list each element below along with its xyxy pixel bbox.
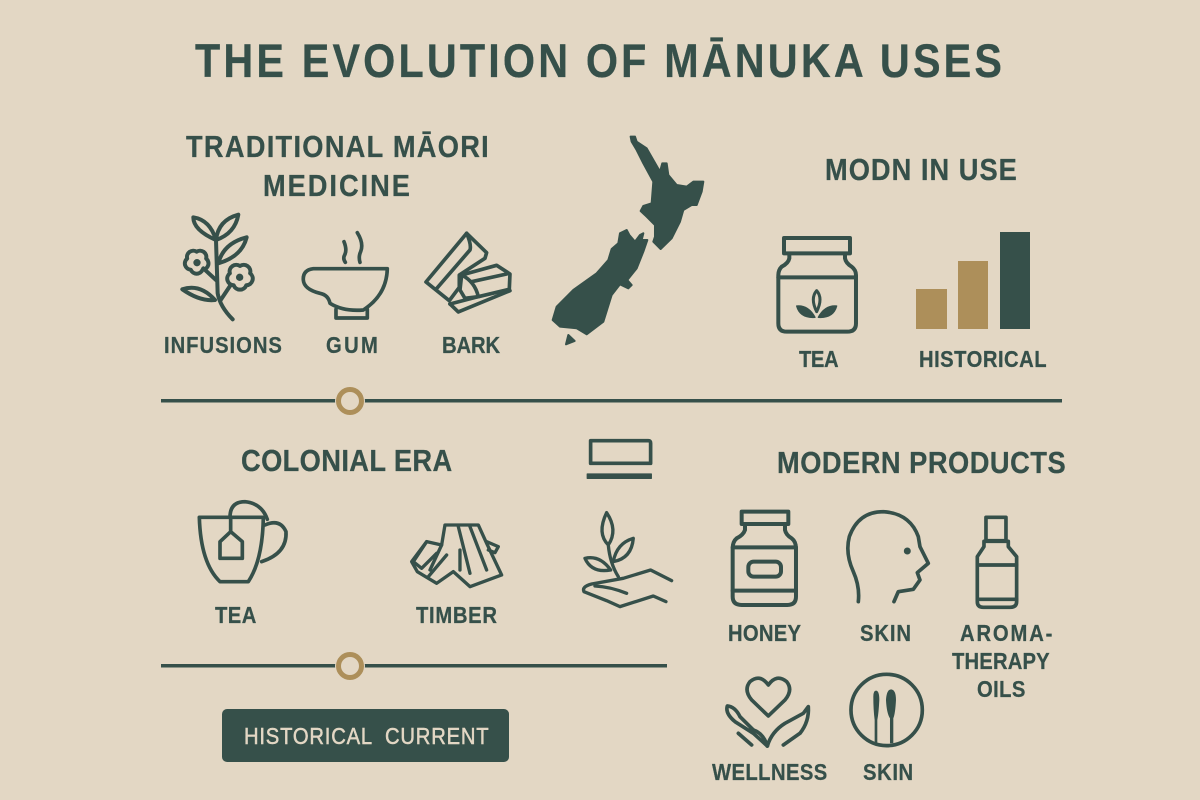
icon: heart in hands [727, 678, 808, 746]
label: aromatherapy oils [952, 620, 1052, 702]
label: infusions: INFUSIONS [164, 332, 282, 358]
timeline: lower [161, 651, 667, 681]
heading: traditional Māori medicine: TRADITIONAL MĀORI [186, 130, 489, 164]
heading: modern products: MODERN PRODUCTS [777, 446, 1066, 480]
label: timber: TIMBER [416, 602, 497, 628]
icon: laptop [587, 441, 651, 478]
label: gum: GUM [326, 332, 378, 358]
icon: tea jar [778, 238, 856, 332]
title: THE EVOLUTION OF MĀNUKA USES [195, 36, 1002, 88]
heading: modern use: MODN IN USE [825, 153, 1017, 187]
legend button: HISTORICAL CURRENT [244, 723, 489, 749]
icon: utensils in circle [851, 674, 922, 746]
label: bark: BARK [442, 332, 500, 358]
heading: traditional Māori medicine [186, 130, 489, 203]
icon: honey jar [733, 512, 796, 605]
panel: traditional Māori medicine [164, 130, 510, 358]
icon: flowering plant [182, 215, 253, 319]
icon: oil bottle [977, 517, 1017, 607]
legend button [222, 709, 509, 762]
label: tea: TEA [215, 602, 257, 628]
label: aromatherapy oils: OILS [977, 676, 1025, 702]
label: honey: HONEY [728, 620, 802, 646]
label: tea: TEA [799, 346, 839, 372]
heading: traditional Māori medicine: MEDICINE [263, 169, 410, 203]
panel: colonial era [199, 441, 672, 628]
panel: modern products [712, 446, 1066, 785]
label: aromatherapy oils: THERAPY [952, 648, 1050, 674]
label: historical: HISTORICAL [919, 346, 1047, 372]
label: skin: SKIN [860, 620, 911, 646]
map: New Zealand [553, 137, 703, 344]
bar chart [916, 232, 1030, 329]
heading: colonial era: COLONIAL ERA [241, 444, 452, 478]
label: aromatherapy oils: AROMA- [960, 620, 1052, 646]
label: wellness: WELLNESS [712, 759, 827, 785]
icon: timber [412, 525, 502, 587]
timeline: upper [161, 386, 1062, 416]
label: skin: SKIN [863, 759, 913, 785]
icon: bark pieces [426, 233, 510, 312]
icon: tea cup [199, 502, 286, 582]
icon: steaming bowl [303, 233, 387, 318]
icon: plant in hand [584, 513, 672, 607]
icon: head profile [848, 512, 928, 602]
panel: modern use [778, 153, 1047, 372]
